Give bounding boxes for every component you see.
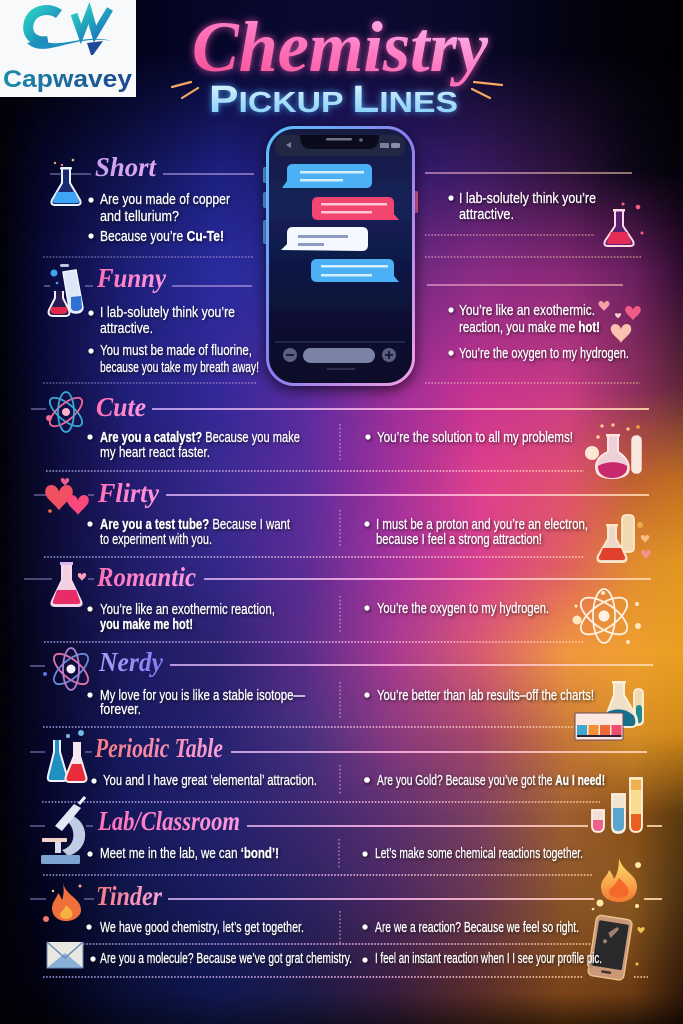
- icon: white atom: [572, 589, 641, 644]
- text: Lab right: Let’s make some chemical reactions together.: [375, 846, 583, 862]
- text: Romantic right: You’re the oxygen to my hydrogen.: [377, 601, 549, 617]
- icon: title sparks: [172, 82, 502, 98]
- icon: hearts: [45, 478, 89, 515]
- text: Short left: Are you made of copper: [100, 192, 230, 208]
- text: Short left: Because you’re Cu-Te!: [100, 229, 224, 245]
- text: Romantic left: you make me hot!: [100, 617, 193, 633]
- text: Cute left: my heart react faster.: [100, 445, 210, 461]
- icon: hearts: [599, 301, 641, 343]
- heading: Cute: Cute: [96, 392, 146, 422]
- text: Funny right: [448, 303, 629, 362]
- text: Cute left: [87, 430, 300, 461]
- chat bubble white: [281, 227, 368, 251]
- heading: Tinder: Tinder: [96, 881, 162, 911]
- heading: Romantic: Romantic: [96, 562, 196, 592]
- icon: left flame: [43, 883, 82, 922]
- icon: atom: [43, 648, 93, 690]
- text: Lab right: [362, 846, 583, 862]
- text: Flirty left: [87, 517, 290, 548]
- text: Flirty right: because I feel a strong attraction!: [376, 532, 542, 548]
- text: Tinder row 2 right: I feel an instant reaction when I I see your profile pic.: [375, 951, 602, 967]
- text: Tinder row 1 right: Are we a reaction? Because we feel so right.: [375, 920, 579, 936]
- chat bubble blue: [282, 164, 372, 188]
- section: Periodic Table: [30, 730, 647, 833]
- icon: pink flask: [51, 562, 86, 606]
- heading: Flirty: Flirty: [97, 478, 160, 508]
- heading: Lab/Classroom: Lab/Classroom: [97, 806, 240, 836]
- text: Nerdy left: My love for you is like a stable isotope—: [100, 688, 305, 704]
- text: Funny right: You’re the oxygen to my hydrogen.: [459, 346, 629, 362]
- text: Nerdy left: [87, 688, 305, 718]
- heading: Funny: Funny: [96, 263, 167, 293]
- text: Tinder row 2 left: Are you a molecule? Because we’ve got grat chemistry.: [100, 951, 352, 967]
- text: Flirty left: to experiment with you.: [100, 532, 212, 548]
- text: Romantic left: You’re like an exothermic reaction,: [100, 602, 275, 618]
- panel: phone: [263, 128, 418, 384]
- icon: right flame: [592, 858, 641, 910]
- section: Romantic: [24, 562, 651, 644]
- icon: atom: [46, 392, 86, 432]
- logo: Capwavey: [0, 0, 136, 97]
- icon: blue flask: [50, 159, 91, 205]
- section: Tinder: [30, 881, 662, 981]
- text: Short right: attractive.: [459, 207, 514, 223]
- icon: small heart and dot: [636, 927, 645, 966]
- text: Tinder row 1 left: We have good chemistry, let’s get together.: [100, 920, 304, 936]
- text: Short right: [448, 191, 596, 223]
- phone input bar: [275, 342, 405, 370]
- phone body: [268, 128, 414, 384]
- text: Lab left: Meet me in the lab, we can ‘bond’!: [100, 846, 279, 862]
- text: Flirty left: Are you a test tube? Because I want: [100, 517, 290, 533]
- text: Tinder row 1 right: [362, 920, 579, 936]
- icon: orange flask and tube: [598, 515, 651, 562]
- icon: red flask: [604, 202, 644, 246]
- text: Flirty right: I must be a proton and you’re an electron,: [376, 517, 588, 533]
- section: Short: [43, 152, 644, 257]
- text: Funny right: You’re like an exothermic.: [459, 303, 595, 319]
- section: Funny: [43, 263, 641, 383]
- chat bubble pink: [312, 197, 399, 220]
- phone status bar and notch: [275, 135, 405, 156]
- phone side buttons: [263, 167, 418, 244]
- title: Pickup Lines: PICKUP LINES: [209, 79, 458, 121]
- text: Funny left: You must be made of fluorine,: [100, 343, 252, 359]
- text: Nerdy left: forever.: [100, 702, 141, 718]
- text: Funny left: [88, 305, 259, 376]
- section: Flirty: [34, 478, 651, 562]
- icon: round flask and tube: [585, 423, 641, 478]
- section: Nerdy: [30, 647, 653, 740]
- icon: two flasks: [48, 730, 86, 782]
- text: Funny left: because you take my breath away!: [100, 360, 259, 376]
- heading: Nerdy: Nerdy: [98, 647, 164, 677]
- icon: flask, tube and color palette: [575, 681, 643, 740]
- text: Funny left: attractive.: [100, 321, 153, 337]
- text: Tinder row 2 left: [90, 951, 352, 967]
- text: Periodic left: You and I have great ‘elemental’ attraction.: [103, 773, 317, 789]
- chat bubble blue: [311, 259, 399, 282]
- logo: Capwavey: Capwavey: [3, 66, 133, 93]
- icon: microscope: [41, 797, 85, 864]
- text: Nerdy right: You’re better than lab results–off the charts!: [377, 688, 594, 704]
- text: Funny right: reaction, you make me hot!: [459, 320, 600, 336]
- icon: right phone: [588, 915, 633, 981]
- icon: envelope: [47, 942, 83, 968]
- text: Romantic left: [87, 602, 275, 633]
- icon: three test tubes: [592, 778, 642, 833]
- section: Cute: [31, 392, 649, 478]
- icon: flask and test tube: [44, 264, 93, 316]
- text: Cute left: Are you a catalyst? Because you make: [100, 430, 300, 446]
- section: Lab/Classroom: [30, 797, 662, 910]
- text: Cute right: You’re the solution to all my problems!: [377, 430, 573, 446]
- text: Short left: [88, 192, 230, 245]
- heading: Periodic Table: Periodic Table: [94, 733, 223, 763]
- heading: Short: Short: [95, 152, 157, 182]
- text: Funny left: I lab-solutely think you’re: [100, 305, 235, 321]
- text: Short left: and tellurium?: [100, 209, 179, 225]
- text: Short right: I lab-solutely think you’re: [459, 191, 596, 207]
- title: Chemistry: Chemistry: [192, 7, 489, 87]
- text: Periodic right: Are you Gold? Because you’ve got the Au I need!: [377, 773, 605, 789]
- text: Flirty right: [364, 517, 588, 548]
